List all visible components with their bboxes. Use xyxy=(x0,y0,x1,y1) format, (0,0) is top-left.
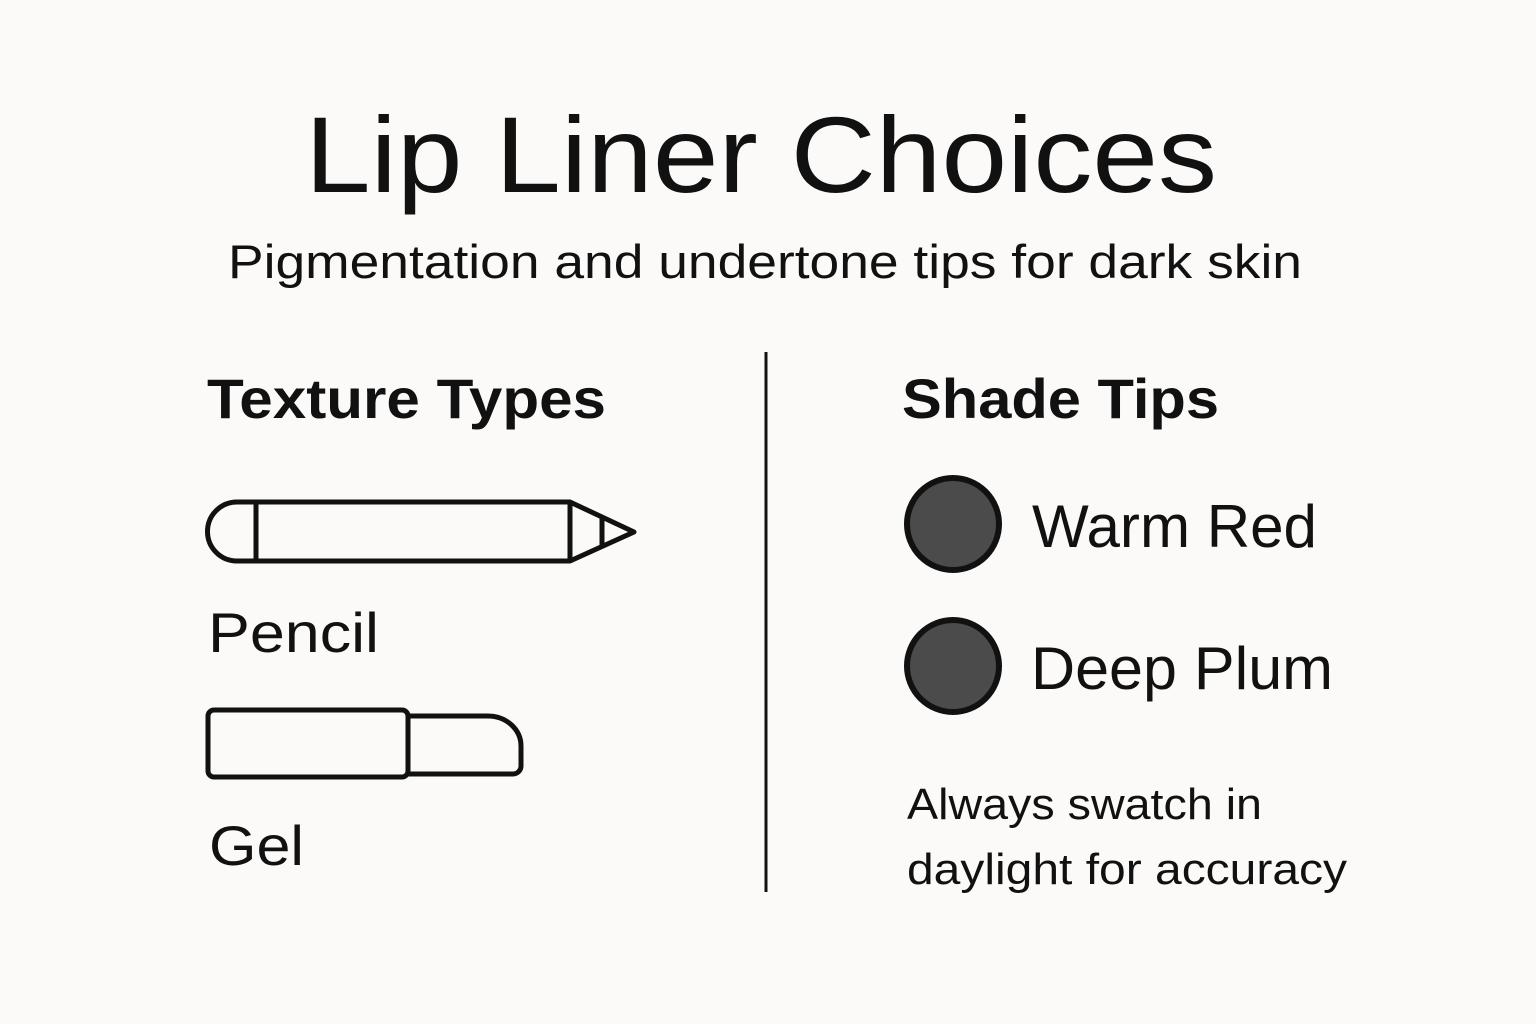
panel: shade tips: daylight for accuracy xyxy=(907,845,1347,894)
subtitle: Pigmentation and undertone tips for dark skin xyxy=(228,235,1302,288)
icon: pencil xyxy=(208,502,634,561)
heading: shade tips: Shade Tips xyxy=(902,367,1219,430)
swatch: warm red xyxy=(907,478,999,570)
title: Lip Liner Choices xyxy=(305,94,1217,215)
label: gel: Gel xyxy=(209,814,304,877)
label: deep plum: Deep Plum xyxy=(1031,635,1333,702)
panel: shade tips xyxy=(902,367,1347,894)
icon: gel xyxy=(208,710,521,777)
swatch: deep plum xyxy=(907,620,999,712)
label: warm red: Warm Red xyxy=(1032,493,1317,560)
divider xyxy=(764,352,768,892)
heading: texture types: Texture Types xyxy=(207,367,606,430)
note: Always swatch in xyxy=(907,780,1262,829)
label: pencil: Pencil xyxy=(208,601,379,664)
panel: texture types xyxy=(207,367,634,877)
